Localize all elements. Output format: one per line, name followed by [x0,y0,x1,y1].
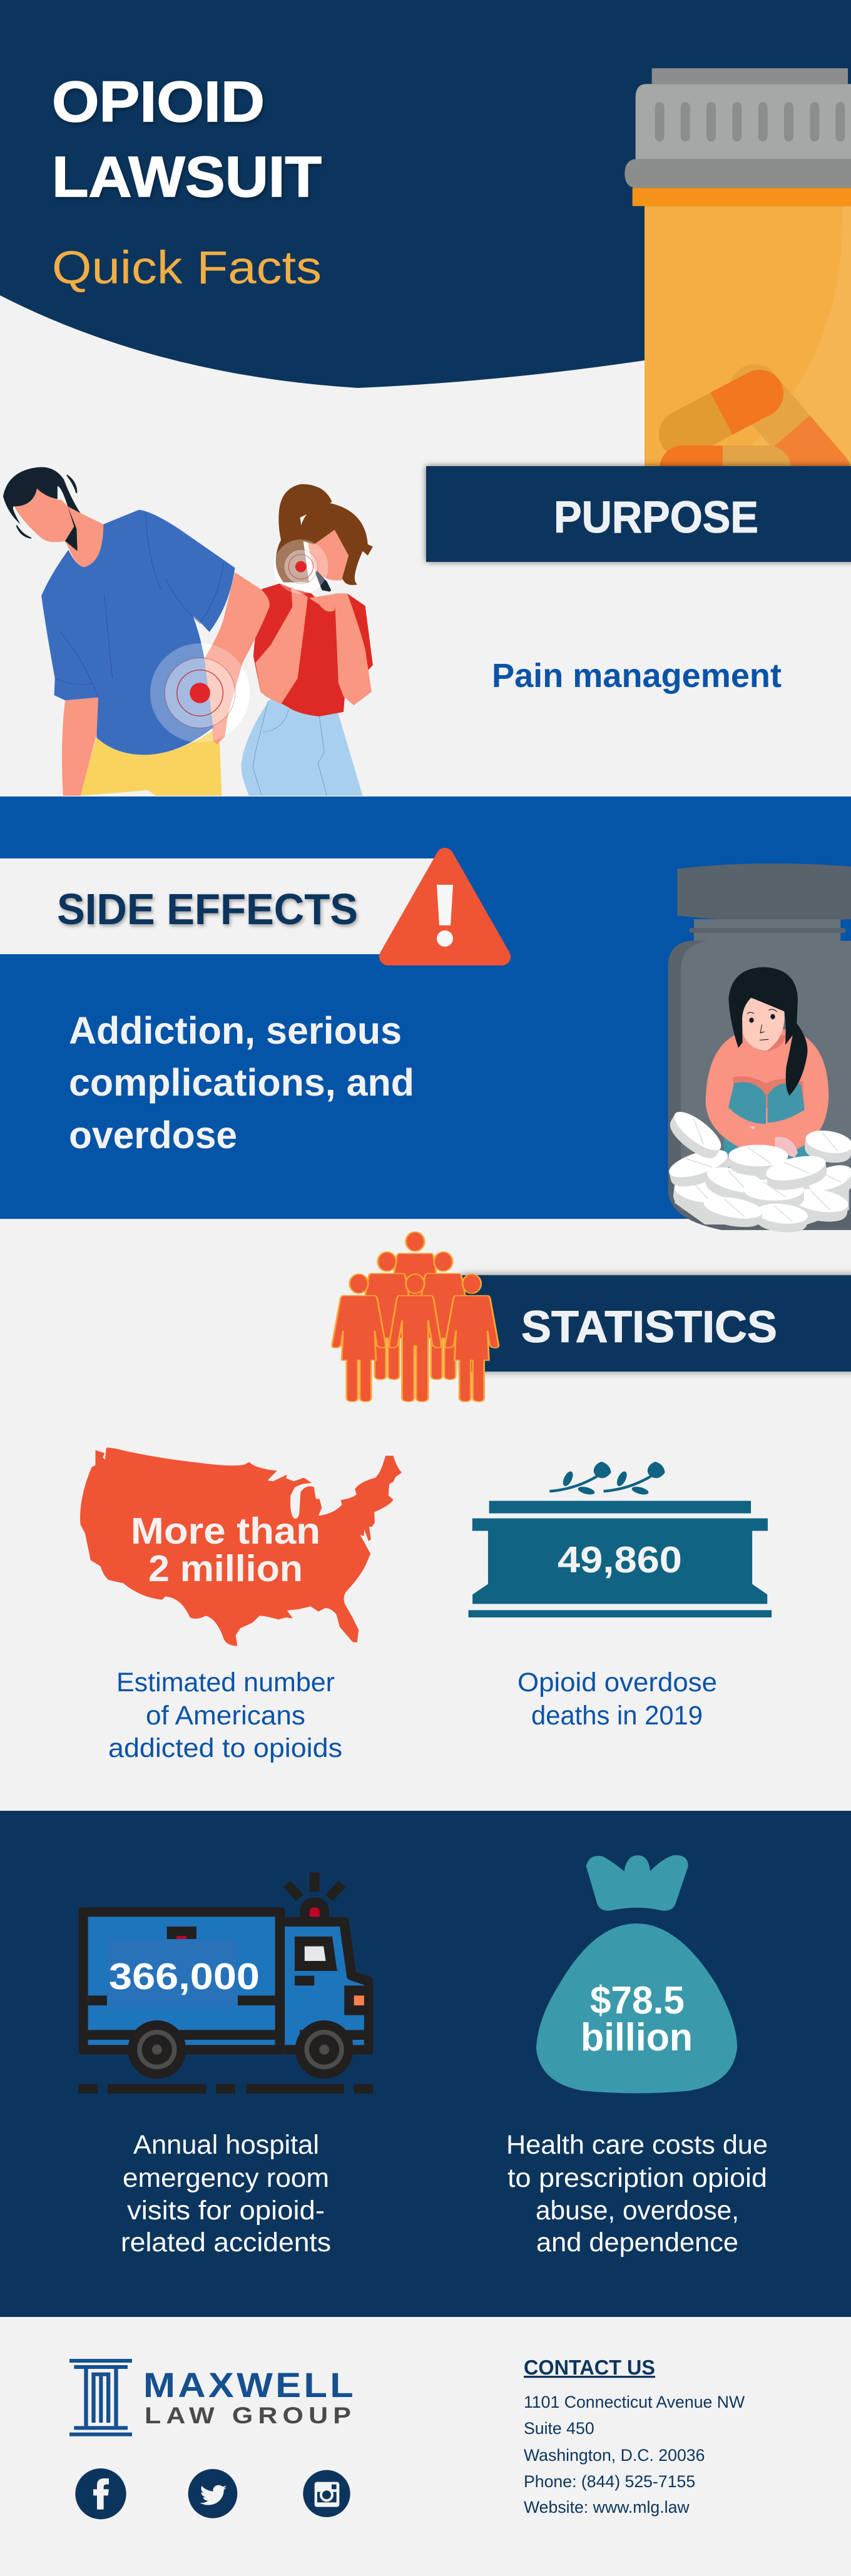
icon: us map stat [80,1447,402,1646]
caption: health care costs: abuse, overdose, [536,2196,739,2226]
illustration: people in pain [3,467,373,796]
title: LAWSUIT [52,145,322,209]
illustration: woman in pill jar [665,863,851,1235]
icon: pill bottle [624,68,851,497]
heading: purpose: PURPOSE [554,493,758,542]
contact info [524,2356,745,2517]
logo: maxwell law group: LAW GROUP [145,2403,356,2428]
panel: side effects [0,797,851,1219]
side effects heading strip [0,858,438,954]
caption: overdose deaths: deaths in 2019 [531,1701,703,1731]
caption: health care costs [506,2130,768,2258]
address lines: Website: www.mlg.law [524,2498,690,2517]
pills pile [665,1105,851,1235]
heading: contact us: CONTACT US [524,2356,655,2379]
capsule: bottom [660,445,768,492]
panel: purpose banner [426,466,851,562]
logo: maxwell law group: MAXWELL [143,2365,356,2405]
address lines: Suite 450 [524,2419,594,2438]
pain marker: back [150,643,250,743]
stat: more than 2 million [131,1510,320,1589]
pain marker: neck [273,539,328,594]
caption: estimated americans [108,1667,342,1763]
stat: 78.5 billion: $78.5 [590,1979,685,2022]
stat: 78.5 billion [581,1979,693,2059]
title [52,70,322,209]
icon: group of people [332,1232,499,1402]
capsule: tilted [683,370,783,434]
panel: statistics banner [461,1275,851,1372]
icon: warning triangle [388,857,502,957]
caption: overdose deaths: Opioid overdose [517,1667,717,1698]
caption: overdose deaths [517,1667,717,1731]
woman with neck pain [241,484,373,796]
caption: estimated americans: of Americans [146,1701,305,1731]
subtitle: Quick Facts [52,242,322,293]
text: pain management: Pain management [492,657,782,695]
caption: health care costs: Health care costs due [506,2130,768,2160]
caption: emergency room visits: visits for opioid- [127,2196,325,2226]
capsule: back right [755,389,851,497]
caption: health care costs: and dependence [536,2227,738,2258]
caption: emergency room visits [121,2130,331,2258]
text: side effects body: Addiction, serious [69,1009,402,1052]
icon: instagram [303,2470,350,2517]
caption: emergency room visits: emergency room [123,2163,329,2193]
stat: 366,000: 366,000 [109,1956,260,1997]
stat: 78.5 billion: billion [581,2016,693,2059]
icon: facebook [75,2468,126,2519]
address lines [524,2393,745,2517]
side effects heading strip: SIDE EFFECTS [57,885,358,934]
address lines: Washington, D.C. 20036 [524,2446,705,2465]
stat: more than 2 million: 2 million [148,1548,303,1589]
icon: twitter [188,2469,237,2518]
text: side effects body [69,1009,414,1156]
icon: tombstone stat [469,1462,772,1617]
icon: pillar [69,2359,132,2436]
address lines: Phone: (844) 525-7155 [524,2472,695,2491]
woman [706,967,828,1191]
caption: health care costs: to prescription opioid [507,2163,767,2193]
heading: statistics: STATISTICS [521,1303,777,1352]
icon: money bag stat [536,1855,737,2093]
panel: costs [0,1811,851,2317]
stat: 49,860: 49,860 [558,1539,682,1581]
caption: emergency room visits: related accidents [121,2227,331,2258]
caption: emergency room visits: Annual hospital [133,2130,319,2160]
text: side effects body: overdose [69,1114,237,1156]
stat: more than 2 million: More than [131,1510,320,1552]
address lines: 1101 Connecticut Avenue NW [524,2393,745,2411]
panel: header [0,0,851,388]
title: OPIOID [52,70,265,134]
icon: ambulance stat [78,1873,373,2094]
caption: estimated americans: Estimated number [116,1667,335,1698]
caption: estimated americans: addicted to opioids [108,1733,342,1763]
man with back pain [3,467,270,796]
text: side effects body: complications, and [69,1061,414,1104]
logo: maxwell law group [69,2359,356,2436]
